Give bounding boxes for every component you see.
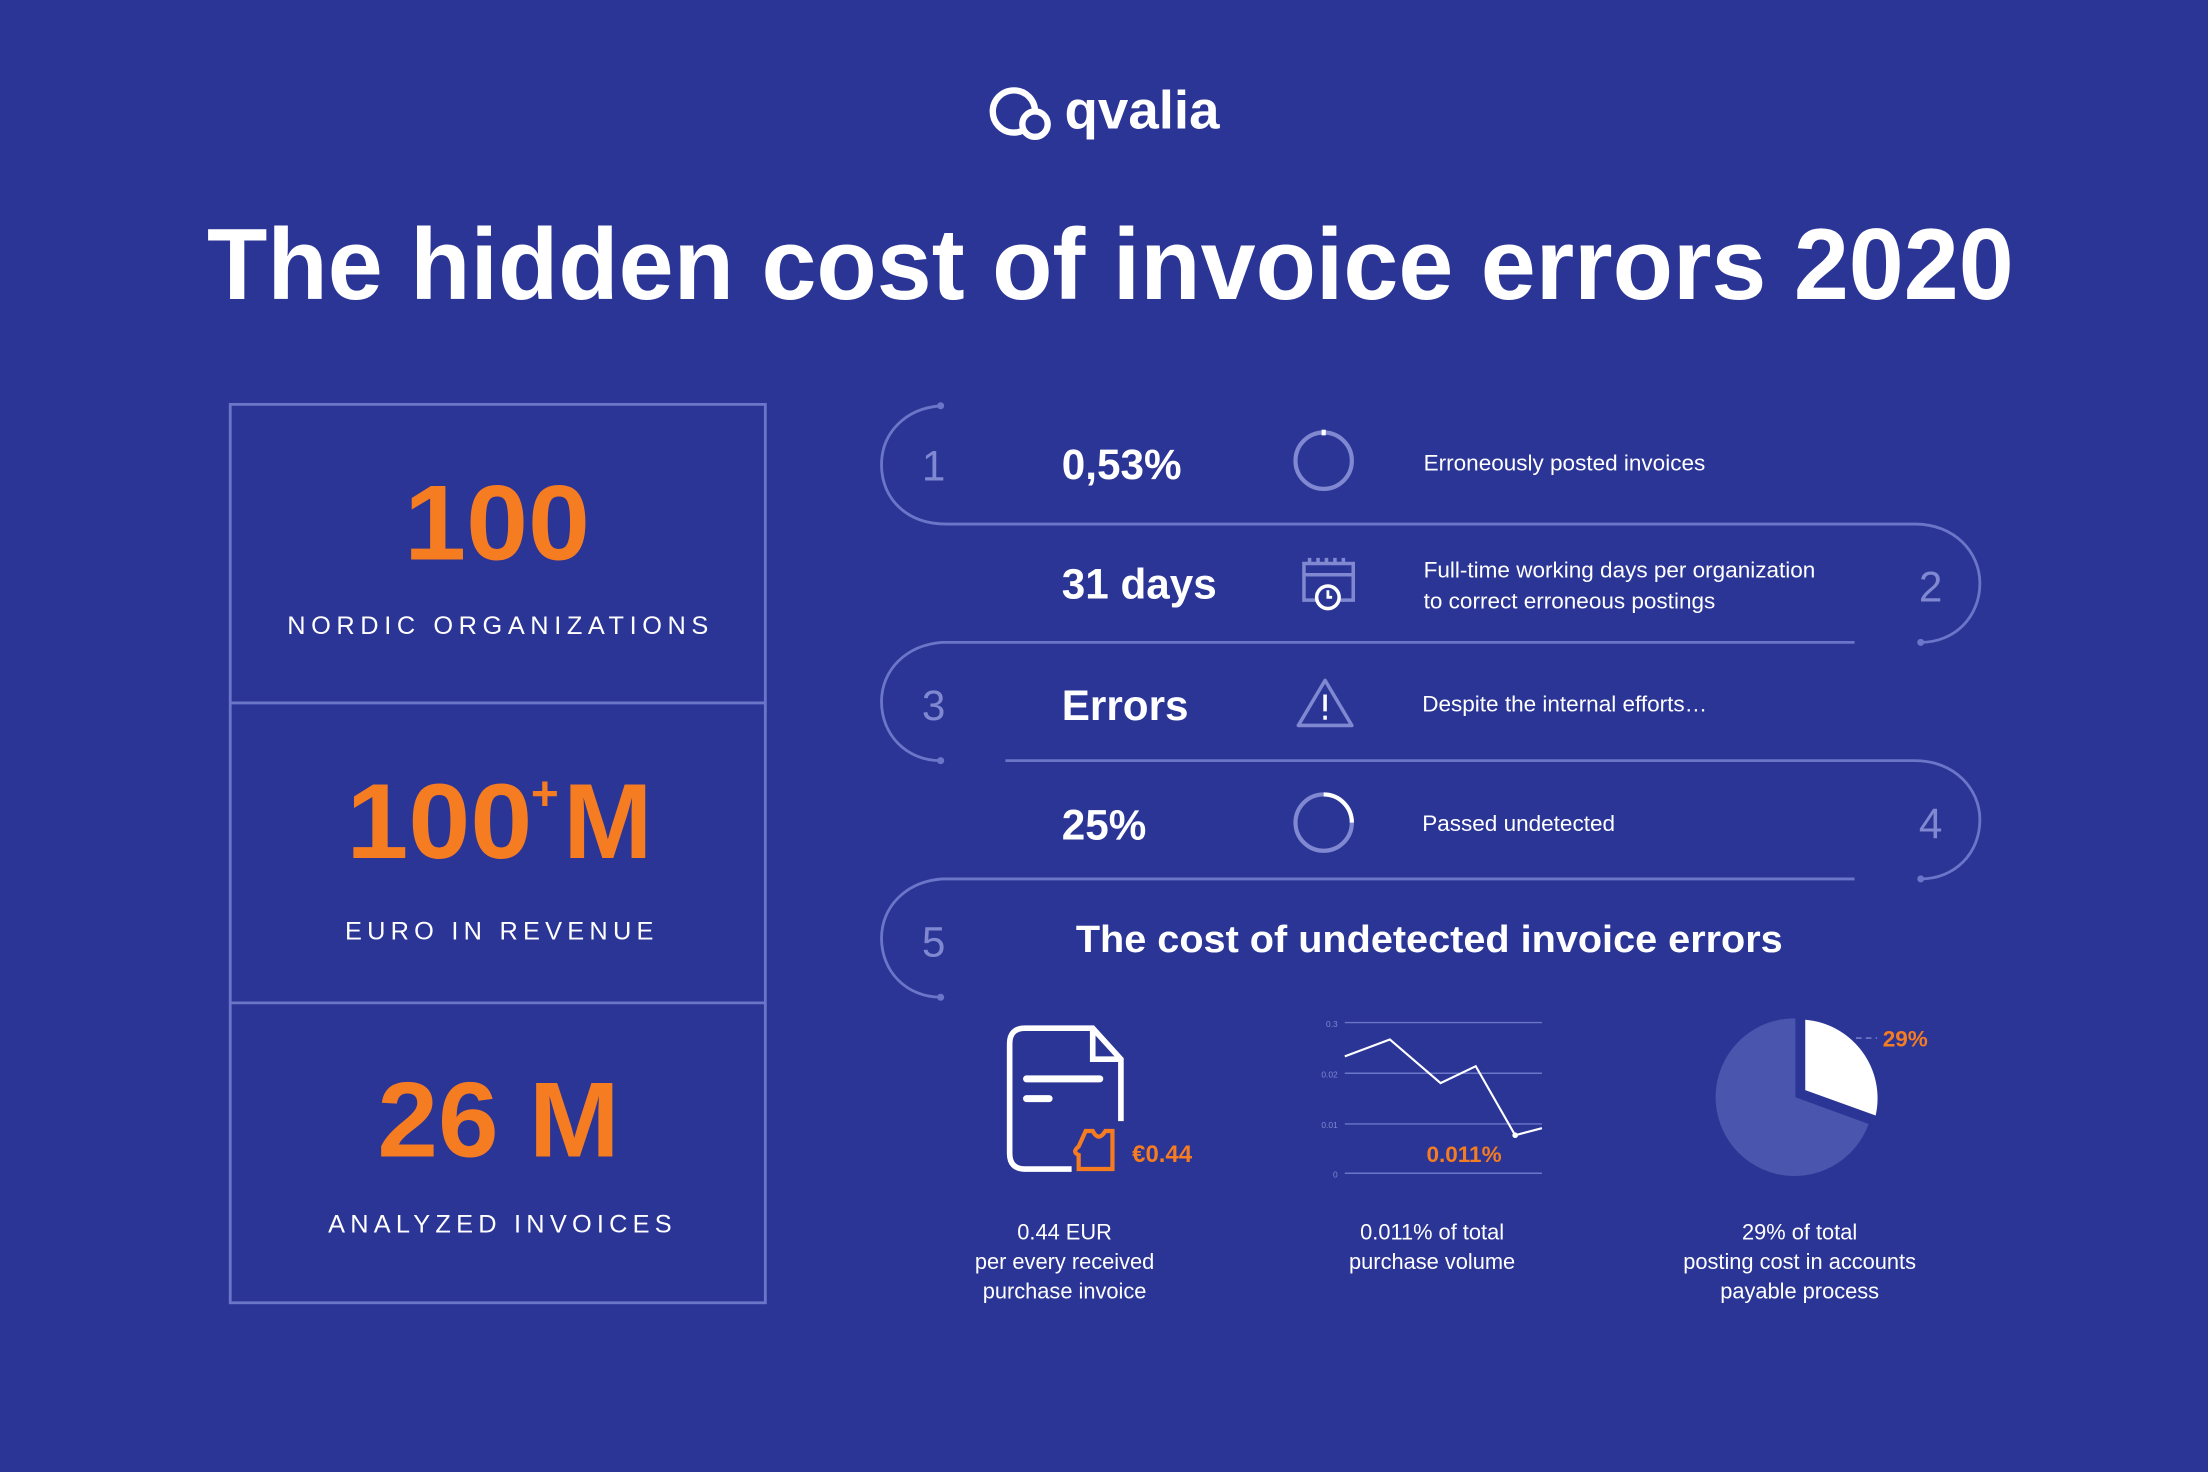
captions: posting cost in accounts	[1683, 1249, 1916, 1274]
step 1: 0,53%	[1062, 441, 1182, 488]
line chart	[1321, 1019, 1542, 1179]
step 3	[922, 680, 1707, 729]
stat: invoices: ANALYZED INVOICES	[328, 1210, 672, 1238]
line chart: 0.3	[1326, 1019, 1338, 1029]
step 4: Passed undetected	[1422, 811, 1615, 836]
logo: qvalia	[1065, 81, 1221, 140]
step 2: to correct erroneous postings	[1424, 589, 1715, 614]
stat: revenue: M	[563, 761, 652, 881]
stat: 100 organizations	[287, 462, 708, 640]
step 5 heading: 5	[922, 918, 945, 965]
stat: invoices	[328, 1059, 672, 1238]
step 2: 2	[1919, 564, 1942, 611]
timeline track	[882, 402, 1980, 1001]
pie chart	[1716, 1018, 1928, 1176]
step 3: 3	[922, 682, 945, 729]
step 2: 31 days	[1062, 561, 1217, 608]
logo	[993, 81, 1221, 140]
stat: invoices: 26 M	[377, 1059, 620, 1179]
line chart: 0.01	[1321, 1120, 1338, 1130]
stat: 100 organizations: 100	[404, 462, 590, 582]
step 4: 25%	[1062, 801, 1146, 848]
step 3: Errors	[1062, 682, 1189, 729]
stat: revenue: 100	[346, 761, 532, 881]
captions: purchase volume	[1349, 1249, 1515, 1274]
captions	[975, 1219, 1916, 1304]
stat: revenue: EURO IN REVENUE	[345, 917, 653, 945]
pie chart: 29%	[1883, 1027, 1928, 1052]
captions: 0.011% of total	[1360, 1219, 1504, 1244]
step 1: 1	[922, 442, 945, 489]
step 1: Erroneously posted invoices	[1424, 451, 1705, 476]
step 2: Full-time working days per organization	[1424, 558, 1815, 583]
captions: 0.44 EUR	[1017, 1219, 1112, 1244]
stat: revenue	[345, 761, 653, 945]
title: The hidden cost of invoice errors 2020	[207, 208, 2014, 321]
step 1	[922, 430, 1705, 489]
step 2	[1062, 558, 1942, 614]
line chart: 0.011%	[1426, 1142, 1502, 1167]
step 3: Despite the internal efforts…	[1422, 691, 1707, 716]
icon: invoice document: €0.44	[1132, 1141, 1193, 1168]
icon: invoice document	[1010, 1028, 1193, 1169]
line chart: 0.02	[1321, 1069, 1338, 1079]
line chart: 0	[1333, 1169, 1338, 1179]
captions: per every received	[975, 1249, 1154, 1274]
stat: 100 organizations: NORDIC ORGANIZATIONS	[287, 612, 708, 640]
step 5 heading: The cost of undetected invoice errors	[1076, 919, 1783, 961]
step 4	[1062, 794, 1942, 851]
captions: payable process	[1720, 1279, 1879, 1304]
captions: purchase invoice	[983, 1279, 1146, 1304]
step 4: 4	[1919, 800, 1942, 847]
panel: key figures	[230, 404, 765, 1303]
captions: 29% of total	[1742, 1219, 1857, 1244]
stat: revenue: +	[531, 768, 559, 821]
